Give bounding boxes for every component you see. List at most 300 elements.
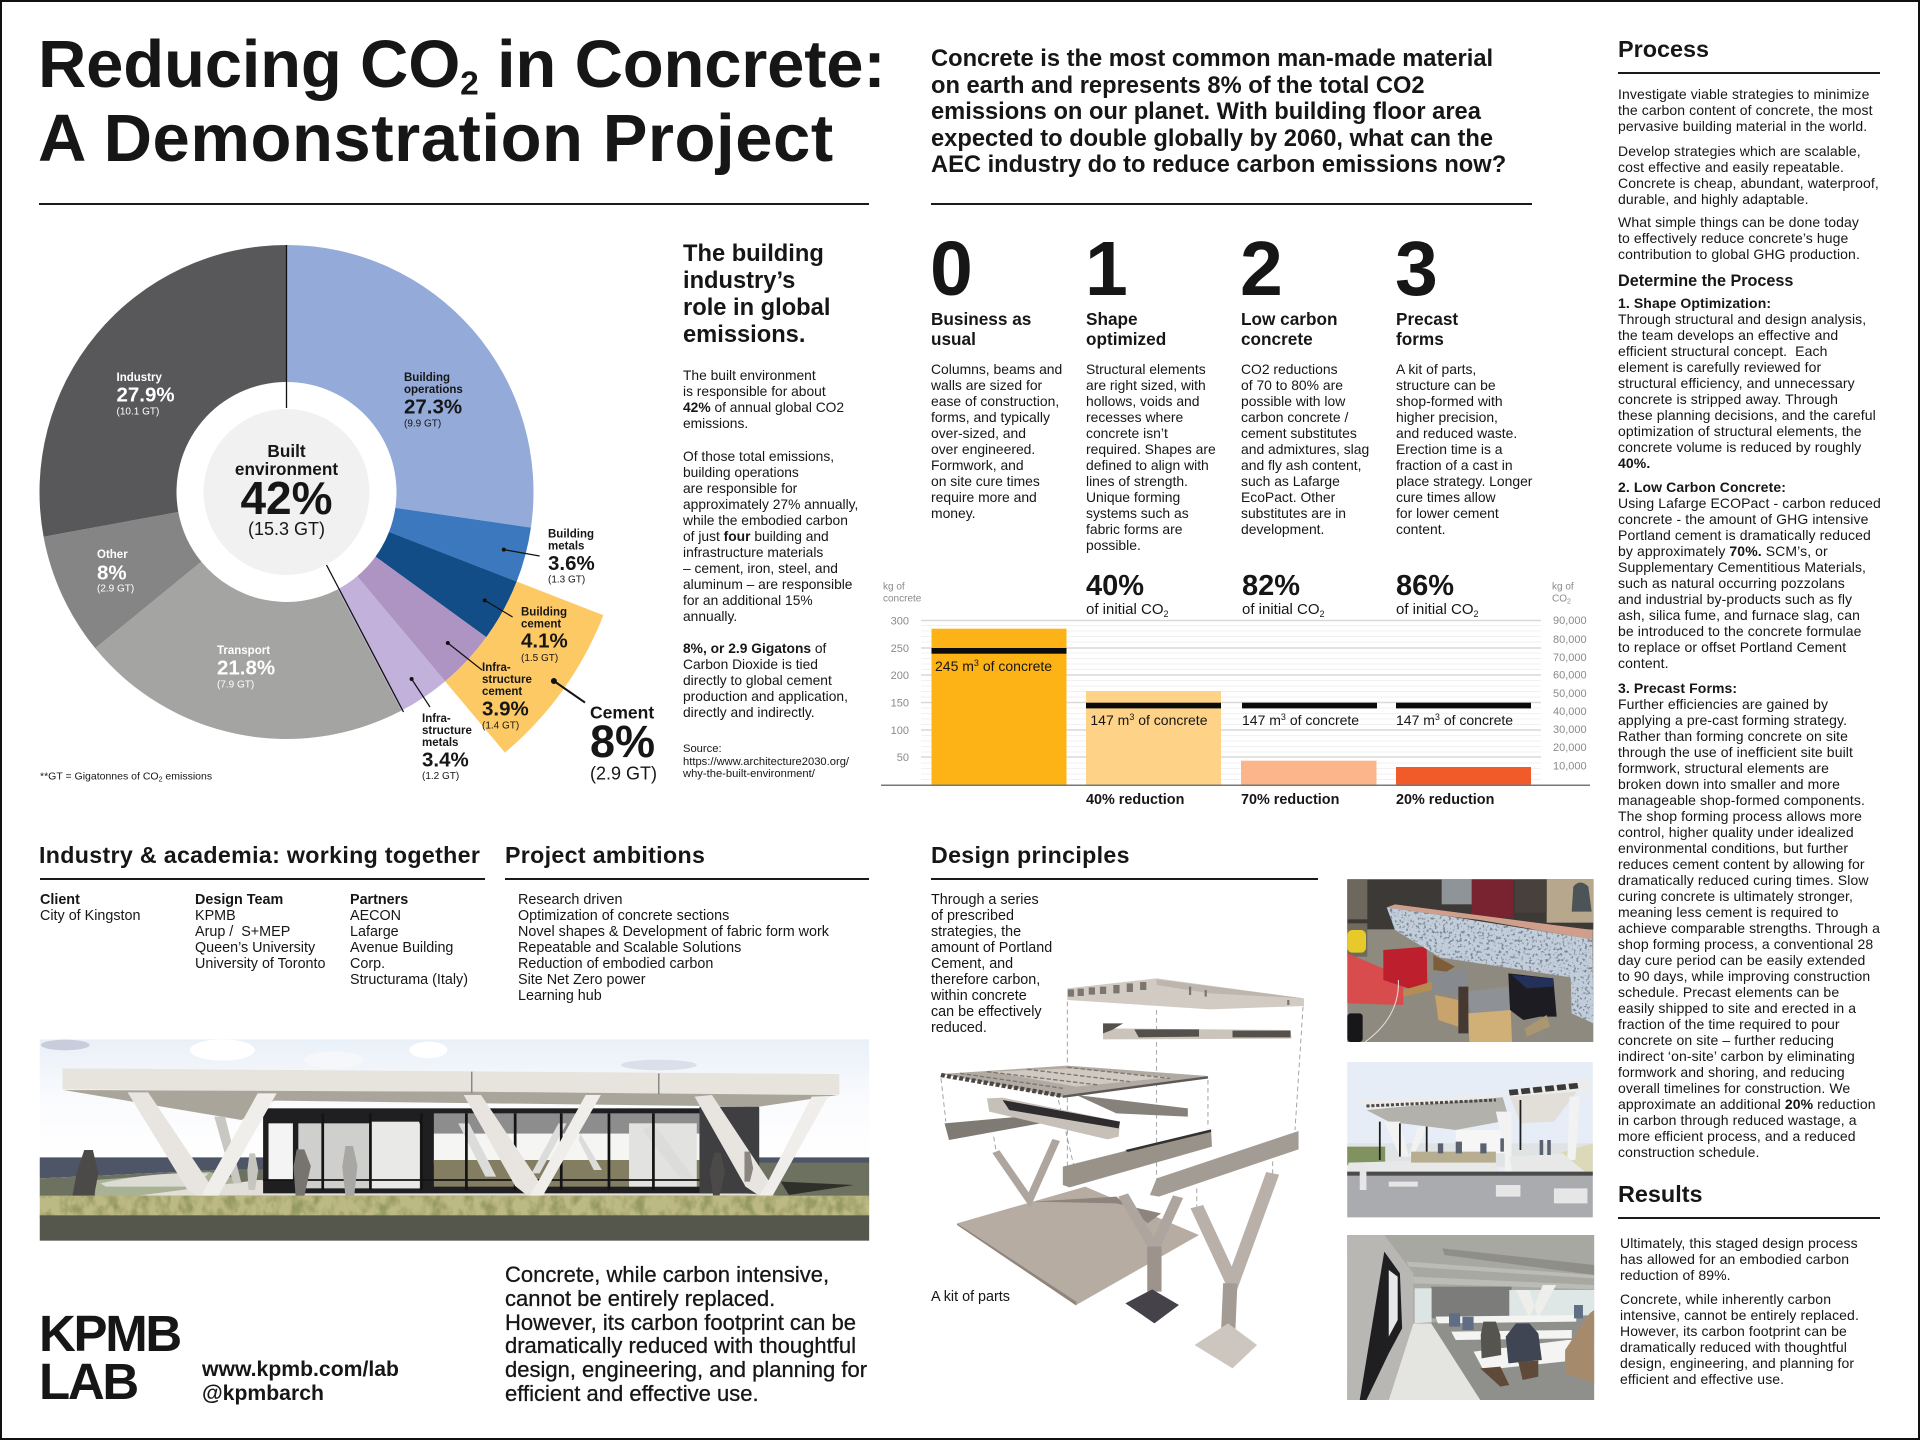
text: precast forms: environmental conditions, but further [1618, 840, 1848, 856]
label: infrastructure cement [482, 662, 532, 732]
step 3: forms [1396, 329, 1444, 349]
V columns [214, 1117, 241, 1183]
stat: 40 percent: of initial CO [1086, 601, 1164, 618]
text: precast forms: achieve comparable strengths. Through a [1618, 920, 1880, 936]
wheat and foreground grass [40, 1196, 869, 1217]
stat: 86 percent [1396, 570, 1479, 619]
step 2: development. [1241, 521, 1324, 537]
title: Reducing CO2 in Concrete: [38, 27, 886, 102]
image: interior classroom [1347, 1235, 1594, 1400]
text: total emissions: of just four building and [683, 529, 829, 544]
step 1: hollows, voids and [1086, 393, 1200, 409]
label: building cement: cement [521, 618, 561, 630]
text: precast forms: formwork, structural elements are [1618, 760, 1829, 776]
step 3: Erection time is a [1396, 441, 1503, 457]
left axis labels: 50 [897, 752, 909, 764]
text: precast forms: applying a pre-cast forming strategy. [1618, 712, 1847, 728]
text: precast forms: meaning less cement is required to [1618, 904, 1839, 920]
text: shape optimization [1618, 295, 1876, 471]
text: process intro 2 [1618, 143, 1879, 207]
intro question: expected to double globally by 2060, what can the [931, 126, 1493, 152]
label: building cement [521, 606, 568, 664]
text: precast forms: fraction of the time required to pour [1618, 1016, 1840, 1032]
text: process intro 1 [1618, 86, 1873, 134]
label: transport: 21.8% [217, 656, 275, 680]
image: building rendering [40, 1040, 870, 1241]
text: process intro 1: pervasive building material in the world. [1618, 118, 1867, 134]
contact links: www.kpmb.com/lab [202, 1358, 399, 1381]
text: shape optimization: element is carefully reviewed for [1618, 359, 1821, 375]
bar: shape optimized: 3 [1129, 712, 1134, 722]
credits: design team: KPMB [195, 908, 236, 924]
text: precast forms: shop forming process, a conventional 28 [1618, 936, 1873, 952]
text: design principles: can be effectively [931, 1004, 1042, 1020]
label: infrastructure cement: 3.9% [482, 698, 529, 720]
credits: partners: Structurama (Italy) [350, 972, 468, 988]
step 1: optimized [1086, 329, 1166, 349]
right axis labels: 60,000 [1553, 670, 1587, 682]
left axis labels: 300 [891, 616, 909, 628]
step 0: usual [931, 329, 976, 349]
text: low carbon concrete: ash, silica fume, and furnace slag, can [1618, 607, 1860, 623]
slice: industry [40, 245, 286, 537]
heading: building industry role: The building [683, 241, 824, 267]
callout lines [410, 548, 585, 707]
label: transport: (7.9 GT) [217, 680, 254, 690]
step 0: Business as [931, 309, 1031, 329]
text: design principles: Cement, and [931, 956, 1013, 972]
stat: 82 percent [1242, 570, 1325, 619]
right axis labels: 80,000 [1553, 634, 1587, 646]
text: results 2: intensive, cannot be entirely replaced. [1620, 1307, 1859, 1323]
reduction labels [1086, 792, 1494, 808]
text: precast forms: The shop forming process allows more [1618, 808, 1862, 824]
label: building operations: 27.3% [404, 396, 462, 418]
text: results 1 [1620, 1235, 1858, 1283]
label: infrastructure cement: Infra- [482, 662, 511, 674]
logo: KPMB LAB: LAB [39, 1352, 137, 1410]
right axis labels: 20,000 [1553, 742, 1587, 754]
step 3: place strategy. Longer [1396, 473, 1532, 489]
top plank [1067, 978, 1304, 1009]
step 3: A kit of parts, [1396, 361, 1476, 377]
step 2: cement substitutes [1241, 425, 1357, 441]
step 1: possible. [1086, 537, 1141, 553]
label: building metals: (1.3 GT) [548, 574, 585, 586]
text: design principles: therefore carbon, [931, 972, 1040, 988]
built environment centre: Built [267, 441, 306, 461]
bar: low carbon concrete: of concrete [1286, 712, 1359, 728]
stat: 86 percent: 86% [1396, 570, 1454, 602]
deck [941, 1066, 1208, 1097]
step 0: on site cure times [931, 473, 1040, 489]
closing statement [505, 1262, 867, 1406]
step 0: require more and [931, 489, 1037, 505]
left axis labels: 250 [891, 643, 909, 655]
text: total emissions: are responsible for [683, 481, 797, 496]
text: design principles: reduced. [931, 1020, 987, 1036]
text: total emissions: infrastructure materials [683, 545, 823, 560]
text: shape optimization: structural efficiency, and unnecessary [1618, 375, 1855, 391]
bar: business as usual [932, 629, 1066, 785]
bar: shape optimized: 147 m [1090, 712, 1129, 728]
logo: KPMB LAB [39, 1305, 180, 1410]
label: infrastructure metals: structure [422, 725, 472, 737]
step 3: content. [1396, 521, 1445, 537]
step 1 [1085, 226, 1216, 553]
credits: partners: Lafarge [350, 924, 399, 940]
bar: precast forms: 147 m [1396, 712, 1435, 728]
step 0: 0 [930, 226, 973, 312]
dashed guides [941, 1002, 1303, 1207]
text: results 2: efficient and effective use. [1620, 1371, 1784, 1387]
list: project ambitions: Optimization of concrete sections [518, 908, 729, 924]
credits: partners: Avenue Building [350, 940, 453, 956]
label: transport: Transport [217, 645, 270, 657]
text: process intro 2: Develop strategies which are scalable, [1618, 143, 1861, 159]
built environment centre: 42% [240, 472, 333, 524]
text: total emissions: Of those total emissions, [683, 449, 834, 464]
text: low carbon concrete: content. [1618, 655, 1669, 671]
built environment centre [204, 409, 370, 575]
text: process intro 2: durable, and highly adaptable. [1618, 191, 1809, 207]
step 0: walls are sized for [931, 377, 1042, 393]
label: industry: (10.1 GT) [116, 406, 159, 418]
text: shape optimization: optimization of structural elements, the [1618, 423, 1862, 439]
step 0: Formwork, and [931, 457, 1024, 473]
slice: building metals [389, 508, 531, 581]
label: building cement: 4.1% [521, 630, 568, 652]
credits: partners [350, 892, 468, 988]
label: building operations: operations [404, 384, 463, 396]
text: low carbon concrete: be introduced to the concrete formulae [1618, 623, 1862, 639]
label: transport [217, 645, 275, 690]
text: precast forms: 3. Precast Forms: [1618, 680, 1737, 696]
intro question: emissions on our planet. With building floor area [931, 99, 1481, 125]
text: precast forms: control, higher quality under idealized [1618, 824, 1854, 840]
step 1: lines of strength. [1086, 473, 1188, 489]
credits: design team [195, 892, 325, 972]
logo: KPMB LAB: KPMB [39, 1305, 180, 1362]
text: precast forms: broken down into smaller and more [1618, 776, 1840, 792]
right axis labels: kg of [1552, 582, 1574, 592]
step 3: higher precision, [1396, 409, 1498, 425]
step 3 [1395, 226, 1532, 537]
text: low carbon concrete [1618, 479, 1881, 671]
step 1: Shape [1086, 309, 1138, 329]
text: precast forms: construction schedule. [1618, 1144, 1760, 1160]
heading: building industry role: emissions. [683, 322, 805, 348]
text: shape optimization: efficient structural concept. Each [1618, 343, 1827, 359]
left axis labels [883, 582, 922, 764]
bar chart: concrete and carbon [881, 570, 1590, 808]
label: other: (2.9 GT) [97, 584, 134, 594]
bar: shape optimized [1086, 691, 1221, 785]
upper beam [1103, 1028, 1291, 1039]
list: project ambitions: Site Net Zero power [518, 972, 646, 988]
right axis labels: 30,000 [1553, 724, 1587, 736]
cement wedge [445, 581, 603, 753]
text: design principles: of prescribed [931, 908, 1014, 924]
list: project ambitions: Novel shapes & Development of fabric form work [518, 924, 829, 940]
reduction labels: 20% reduction [1396, 792, 1494, 808]
text: precast forms: dramatically reduced curing times. Slow [1618, 872, 1869, 888]
left axis labels: concrete [883, 594, 922, 604]
text: shape optimization: concrete volume is reduced by roughly [1618, 439, 1861, 455]
text: process intro 2: cost effective and easily repeatable. [1618, 159, 1844, 175]
heading: building industry role: industry’s [683, 268, 795, 294]
step 1: 1 [1085, 226, 1128, 312]
stat: 86 percent: of initial CO [1396, 601, 1474, 618]
step 2: concrete [1241, 329, 1313, 349]
credits: design team: Queen’s University [195, 940, 315, 956]
text: total emissions: building operations [683, 465, 799, 480]
label: cement total: 8% [590, 716, 655, 767]
text: built environment: is responsible for about [683, 384, 826, 399]
step 1: required. Shapes are [1086, 441, 1216, 457]
heading: results: Results [1618, 1181, 1702, 1207]
text: shape optimization: these planning decisions, and the careful [1618, 407, 1876, 423]
stat: 82 percent: 2 [1320, 609, 1325, 619]
text: precast forms: concrete on site – further reducing [1618, 1032, 1834, 1048]
step 2: Low carbon [1241, 309, 1337, 329]
right axis labels [1552, 582, 1587, 773]
step 1: fabric forms are [1086, 521, 1182, 537]
built environment centre: (15.3 GT) [248, 519, 325, 539]
text: results 2: dramatically reduced with thoughtful [1620, 1339, 1847, 1355]
text: process intro 1: the carbon content of concrete, the most [1618, 102, 1873, 118]
footnote: GT definition: emissions [162, 770, 212, 782]
source note: Source: [683, 743, 722, 755]
text: precast forms: Further efficiencies are gained by [1618, 696, 1828, 712]
text: low carbon concrete: to replace or offset Portland Cement [1618, 639, 1846, 655]
bar: business as usual: of concrete [979, 658, 1052, 674]
label: other: Other [97, 549, 128, 561]
stat: 82 percent: 82% [1242, 570, 1300, 602]
label: industry: 27.9% [116, 384, 175, 406]
text: process intro 1: Investigate viable strategies to minimize [1618, 86, 1870, 102]
slice: other [44, 512, 201, 648]
title: A Demonstration Project [38, 101, 834, 176]
bar: precast forms: 3 [1435, 712, 1440, 722]
text: precast forms: overall timelines for construction. We [1618, 1080, 1850, 1096]
footnote: GT definition: **GT = Gigatonnes of CO [40, 770, 159, 782]
step 3: and reduced waste. [1396, 425, 1517, 441]
text: shape optimization: Through structural and design analysis, [1618, 311, 1866, 327]
text: precast forms: indirect ‘on-site’ carbon by eliminating [1618, 1048, 1855, 1064]
slice: infrastructure metals [338, 576, 445, 711]
step 1: recesses where [1086, 409, 1183, 425]
text: results 2: However, its carbon footprint can be [1620, 1323, 1847, 1339]
step 3: shop-formed with [1396, 393, 1503, 409]
text: precast forms: curing concrete is ultimately stronger, [1618, 888, 1853, 904]
label: building cement: (1.5 GT) [521, 653, 558, 664]
contact links: @kpmbarch [202, 1382, 324, 1405]
text: total emissions: aluminum – are responsible [683, 577, 852, 592]
text: results 1: has allowed for an embodied carbon [1620, 1251, 1849, 1267]
text: results 2 [1620, 1291, 1859, 1387]
source note [683, 743, 849, 780]
image: exploded kit of parts diagram [941, 978, 1304, 1368]
footnote: GT definition: 2 [159, 776, 163, 784]
credits: partners: Corp. [350, 956, 385, 972]
text: shape optimization: the team develops an effective and [1618, 327, 1838, 343]
credits: client: Client [40, 892, 80, 908]
label: infrastructure cement: cement [482, 686, 522, 698]
text: design principles: strategies, the [931, 924, 1021, 940]
label: building operations [404, 372, 463, 430]
stat: 40 percent [1086, 570, 1169, 619]
stat: 86 percent: 2 [1474, 609, 1479, 619]
step 2: 2 [1240, 226, 1283, 312]
closing statement: Concrete, while carbon intensive, [505, 1262, 829, 1287]
step 0: ease of construction, [931, 393, 1059, 409]
mid beams [945, 1115, 1041, 1140]
text: precast forms: approximate an additional 20% reduction [1618, 1096, 1876, 1112]
text: design principles: within concrete [931, 988, 1027, 1004]
credits: client [40, 892, 140, 924]
text: built environment: 42% of annual global CO2 [683, 400, 844, 415]
step 2: and fly ash content, [1241, 457, 1361, 473]
label: building metals: Building [548, 528, 594, 540]
label: infrastructure metals: metals [422, 737, 458, 749]
text: low carbon concrete: Supplementary Cementitious Materials, [1618, 559, 1866, 575]
label: infrastructure metals [422, 713, 472, 782]
label: building operations: Building [404, 372, 450, 384]
list: project ambitions: Reduction of embodied carbon [518, 956, 713, 972]
closing statement: design, engineering, and planning for [505, 1357, 867, 1382]
text: low carbon concrete: such as natural occurring pozzolans [1618, 575, 1845, 591]
heading: process: Process [1618, 36, 1709, 62]
left axis labels: 200 [891, 670, 909, 682]
image: section perspective [1347, 1062, 1593, 1217]
text: precast forms: through the use of inefficient site built [1618, 744, 1853, 760]
text: process intro 3 [1618, 214, 1860, 262]
heading: determine the process: Determine the Process [1618, 272, 1793, 290]
text: cement share: production and application, [683, 689, 848, 704]
step 2: of 70 to 80% are [1241, 377, 1343, 393]
step 1: are right sized, with [1086, 377, 1206, 393]
closing statement: cannot be entirely replaced. [505, 1286, 775, 1311]
source note: why-the-built-environment/ [683, 768, 815, 780]
intro question: Concrete is the most common man-made material [931, 46, 1493, 72]
text: results 1: reduction of 89%. [1620, 1267, 1731, 1283]
bar: low carbon concrete: 3 [1281, 712, 1286, 722]
bar: precast forms [1396, 703, 1531, 785]
list: project ambitions: Repeatable and Scalable Solutions [518, 940, 741, 956]
text: precast forms: schedule. Precast elements can be [1618, 984, 1839, 1000]
bar: shape optimized: of concrete [1134, 712, 1208, 728]
intro question: on earth and represents 8% of the total CO2 [931, 73, 1425, 99]
right axis labels: 50,000 [1553, 688, 1587, 700]
text: total emissions: while the embodied carbon [683, 513, 848, 528]
right axis labels: CO [1552, 594, 1567, 604]
pie chart: global emissions [40, 245, 657, 784]
text: built environment: emissions. [683, 416, 748, 431]
label: infrastructure metals: (1.2 GT) [422, 771, 459, 782]
roof slab [63, 1068, 839, 1095]
text: cement share: directly to global cement [683, 673, 832, 688]
text: total emissions [683, 449, 858, 624]
stat: 82 percent: of initial CO [1242, 601, 1320, 618]
bar: low carbon concrete: 147 m [1242, 712, 1281, 728]
text: precast forms: easily shipped to site and erected in a [1618, 1000, 1856, 1016]
step 1: systems such as [1086, 505, 1189, 521]
title [38, 27, 886, 176]
text: process intro 3: contribution to global GHG production. [1618, 246, 1860, 262]
step 0: Columns, beams and [931, 361, 1062, 377]
label: building metals: 3.6% [548, 552, 595, 575]
built environment centre: environment [235, 459, 338, 479]
text: cement share [683, 641, 848, 720]
text: total emissions: for an additional 15% [683, 593, 813, 608]
text: precast forms: to 90 days, while improving construction [1618, 968, 1870, 984]
step 1: concrete isn’t [1086, 425, 1168, 441]
label: other: 8% [97, 562, 127, 584]
intro question [931, 46, 1506, 178]
building glass [263, 1108, 759, 1193]
text: total emissions: approximately 27% annually, [683, 497, 858, 512]
text: design principles: Through a series [931, 892, 1039, 908]
image: test beam photo [1347, 879, 1594, 1042]
step 0: money. [931, 505, 976, 521]
text: precast forms: formwork and shoring, and reducing [1618, 1064, 1845, 1080]
list: project ambitions: Research driven [518, 892, 622, 908]
text: precast forms: manageable shop-formed components. [1618, 792, 1865, 808]
text: precast forms: more efficient process, and a reduced [1618, 1128, 1856, 1144]
label: building cement: Building [521, 606, 567, 618]
text: process intro 3: to effectively reduce concrete’s huge [1618, 230, 1848, 246]
text: precast forms [1618, 680, 1880, 1160]
stat: 40 percent: 2 [1164, 609, 1169, 619]
credits: design team: University of Toronto [195, 956, 325, 972]
list: project ambitions [518, 892, 829, 1004]
heading: project ambitions: Project ambitions [505, 842, 705, 868]
label: infrastructure metals: Infra- [422, 713, 451, 725]
heading: industry and academia: Industry & academia: working together [39, 842, 480, 868]
bar: precast forms: of concrete [1440, 712, 1513, 728]
step 2: and admixtures, slag [1241, 441, 1369, 457]
credits: partners: AECON [350, 908, 401, 924]
label: cement total: Cement [590, 702, 654, 722]
text: low carbon concrete: concrete - the amount of GHG intensive [1618, 511, 1868, 527]
text: low carbon concrete: and industrial by-products such as fly [1618, 591, 1852, 607]
step 0: over engineered. [931, 441, 1035, 457]
slice: infrastructure cement [357, 557, 486, 681]
heading: building industry role: role in global [683, 295, 830, 321]
text: precast forms: Rather than forming concrete on site [1618, 728, 1848, 744]
text: results 2: Concrete, while inherently carbon [1620, 1291, 1831, 1307]
label: infrastructure cement: structure [482, 674, 532, 686]
label: cement total: (2.9 GT) [590, 764, 657, 784]
text: shape optimization: concrete is stripped away. Through [1618, 391, 1838, 407]
caption: kit of parts: A kit of parts [931, 1289, 1010, 1305]
reduction labels: 40% reduction [1086, 792, 1184, 808]
text: low carbon concrete: Portland cement is dramatically reduced [1618, 527, 1871, 543]
bar: business as usual: 245 m [935, 658, 974, 674]
text: precast forms: reduces cement content by allowing for [1618, 856, 1865, 872]
right axis labels: 90,000 [1553, 615, 1587, 627]
step 3: fraction of a cast in [1396, 457, 1513, 473]
step 1: Structural elements [1086, 361, 1206, 377]
step 2 [1240, 226, 1369, 537]
text: design principles: amount of Portland [931, 940, 1052, 956]
lower beams [1063, 1129, 1212, 1187]
step 2: EcoPact. Other [1241, 489, 1335, 505]
label: industry [116, 372, 175, 418]
text: total emissions: annually. [683, 609, 737, 624]
label: cement total [590, 702, 657, 784]
